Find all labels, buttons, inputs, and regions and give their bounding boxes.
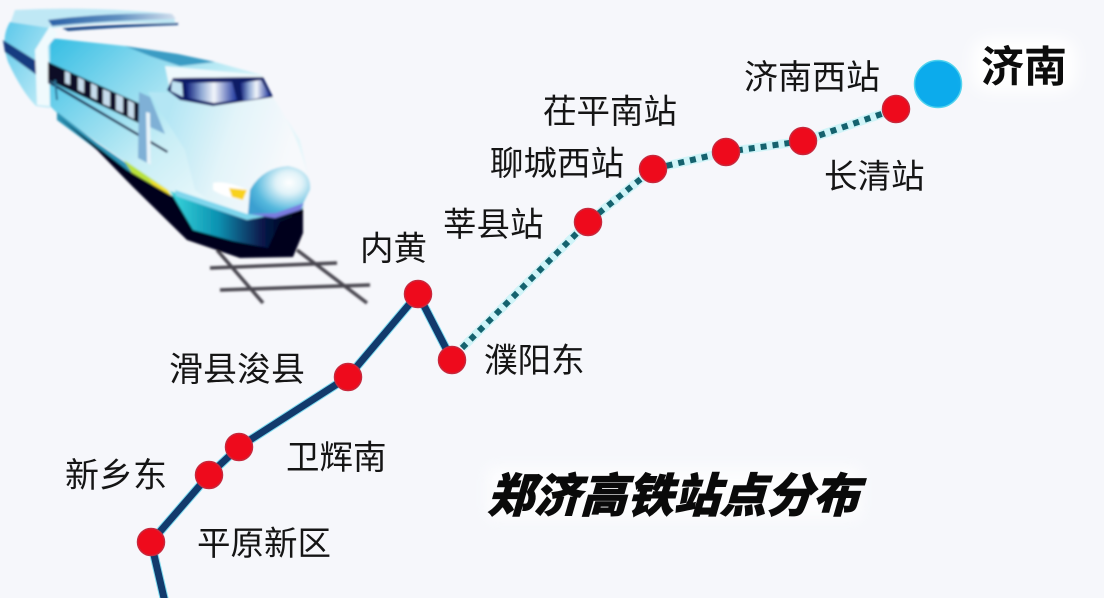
title: 郑济高铁站点分布 xyxy=(484,471,871,523)
station markers xyxy=(138,96,910,556)
station labels: 莘县站 xyxy=(443,207,544,244)
train tracks xyxy=(210,250,370,303)
car gap xyxy=(35,26,58,106)
illustration: high-speed train xyxy=(3,9,370,303)
train underside and skirt xyxy=(60,118,303,258)
dotted section xyxy=(462,109,896,348)
train roof speed streak xyxy=(10,9,178,31)
train headlight xyxy=(213,182,248,200)
station labels: 平原新区 xyxy=(197,526,331,563)
station labels: 茌平南站 xyxy=(543,94,677,131)
train lower side stripe xyxy=(57,112,138,178)
station labels: 长清站 xyxy=(824,159,924,196)
station labels: 卫辉南 xyxy=(286,440,386,477)
route line xyxy=(151,109,896,598)
station labels: 济南西站 xyxy=(744,59,880,97)
train side windows xyxy=(48,62,168,153)
train body xyxy=(50,38,311,226)
station labels: 滑县浚县 xyxy=(169,351,305,389)
station labels: 聊城西站 xyxy=(490,146,624,183)
station labels: 濮阳东 xyxy=(484,343,584,380)
train windscreen xyxy=(167,77,273,106)
train roof shadow xyxy=(125,46,215,66)
station labels xyxy=(65,59,924,563)
station labels: 内黄 xyxy=(360,231,427,268)
terminal marker: Jinan xyxy=(914,60,962,108)
train front hood xyxy=(148,92,311,222)
train rear car xyxy=(4,22,50,108)
solid section xyxy=(151,294,452,598)
terminal label: Jinan: 济南 xyxy=(981,44,1067,92)
train nose xyxy=(248,166,310,218)
station labels: 新乡东 xyxy=(65,457,167,495)
train door xyxy=(138,92,165,165)
